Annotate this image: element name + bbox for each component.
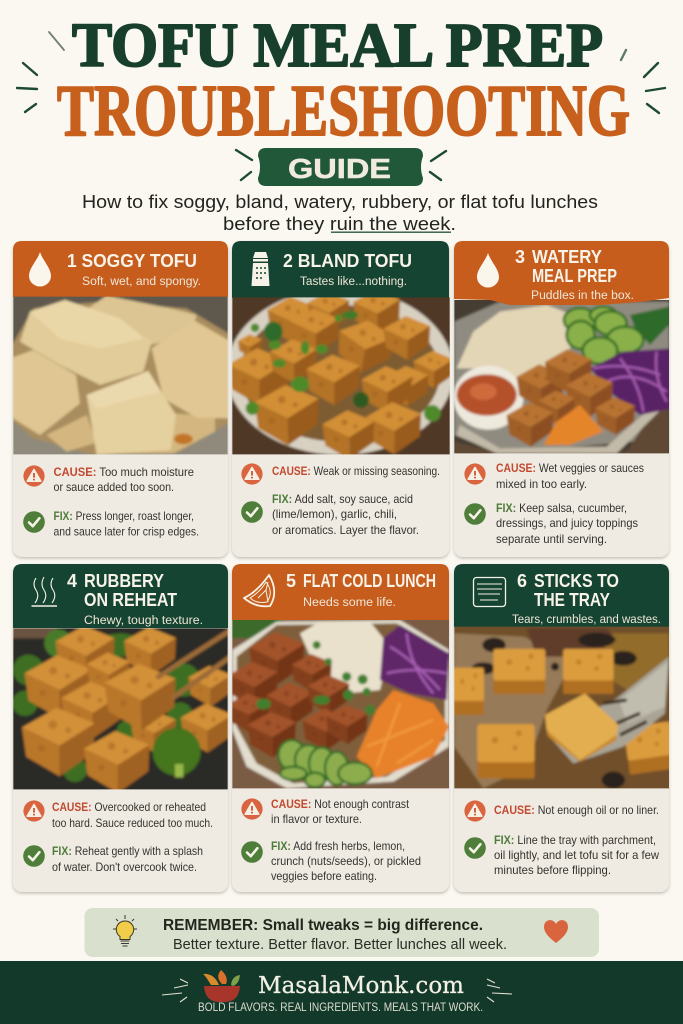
fix: [241, 839, 421, 883]
icon: salt shaker: [252, 252, 270, 286]
cause: [464, 800, 659, 822]
fix: [241, 492, 419, 537]
cause: or sauce added too soon.: [54, 480, 174, 494]
footer rays: [162, 979, 512, 1002]
icon: baking tray: [474, 578, 506, 606]
header: [232, 564, 449, 620]
fix: and sauce later for crisp edges.: [54, 524, 199, 538]
fix: minutes before flipping.: [494, 863, 611, 877]
fix: FIX: Add fresh herbs, lemon,: [271, 839, 405, 853]
photo: tofu in pan with chopsticks: [10, 625, 233, 793]
heading: 3: [515, 247, 525, 267]
fix: [23, 844, 203, 874]
fix: or aromatics. Layer the flavor.: [272, 523, 419, 537]
heading: 6: [517, 571, 527, 591]
fix: [464, 501, 638, 546]
header: [454, 241, 669, 305]
header: [13, 564, 228, 628]
header: [232, 241, 449, 298]
panel: 1 soggy tofu: [10, 241, 231, 557]
tagline: Chewy, tough texture.: [84, 613, 203, 627]
callout: remember: [84, 908, 599, 957]
heading: FLAT COLD LUNCH: [303, 571, 436, 591]
heading: RUBBERY: [84, 571, 164, 591]
title: [57, 12, 630, 151]
heading: MEAL PREP: [532, 266, 617, 286]
heading: 2 BLAND TOFU: [283, 251, 412, 271]
photo: lunch box with glazed tofu: [228, 617, 452, 792]
guide badge: [258, 148, 423, 186]
logo: bowl with leaves: [203, 970, 240, 1002]
photo: soggy tofu: [10, 293, 231, 458]
heading: [515, 247, 617, 286]
brand name: MasalaMonk.com: [258, 973, 464, 999]
heading: [67, 571, 177, 610]
heading: ON REHEAT: [84, 590, 177, 610]
cause: too hard. Sauce reduced too much.: [52, 816, 213, 830]
fix: FIX: Add salt, soy sauce, acid: [272, 492, 413, 506]
cause: [464, 461, 644, 491]
fix: separate until serving.: [496, 532, 607, 546]
heading: [517, 571, 619, 610]
cause: CAUSE: Not enough oil or no liner.: [494, 803, 659, 817]
fix: oil lightly, and let tofu sit for a few: [494, 848, 659, 862]
icon: heart: [544, 920, 568, 943]
cause: in flavor or texture.: [271, 812, 362, 826]
tagline: Soft, wet, and spongy.: [82, 274, 201, 288]
icon: citrus slice: [244, 575, 274, 606]
panel: 3 watery meal prep: [451, 241, 672, 557]
tagline: BOLD FLAVORS. REAL INGREDIENTS. MEALS THAT WORK.: [198, 1002, 483, 1014]
title line 1: TOFU MEAL PREP: [72, 12, 603, 80]
header: [454, 564, 669, 627]
remember text: [163, 917, 507, 953]
heading: 1 SOGGY TOFU: [67, 251, 197, 271]
cause: [241, 463, 440, 485]
icon: water drop: [29, 252, 51, 286]
heading: WATERY: [532, 247, 602, 267]
tagline: Tears, crumbles, and wastes.: [512, 612, 661, 626]
tagline: Needs some life.: [303, 595, 396, 609]
heading: STICKS TO: [534, 571, 619, 591]
heading: THE TRAY: [534, 590, 610, 610]
fix: [464, 833, 659, 877]
heading: 4: [67, 571, 77, 591]
cause: CAUSE: Weak or missing seasoning.: [272, 464, 440, 478]
fix: FIX: Line the tray with parchment,: [494, 833, 656, 847]
icon: light bulb: [113, 915, 137, 946]
panel: 6 sticks to the tray: [451, 564, 676, 892]
heading: 5: [286, 571, 296, 591]
cause: CAUSE: Overcooked or reheated: [52, 800, 206, 814]
remember text: Better texture. Better flavor. Better lunches all week.: [173, 937, 507, 953]
fix: of water. Don't overcook twice.: [52, 860, 197, 874]
panel: 2 bland tofu: [227, 241, 453, 557]
cause: [23, 465, 194, 494]
cause: [23, 800, 213, 830]
cause: [241, 797, 410, 826]
tagline: Tastes like...nothing.: [300, 274, 407, 288]
header: [13, 241, 228, 297]
icon: water drop: [477, 253, 499, 288]
fix: FIX: Keep salsa, cucumber,: [496, 501, 627, 515]
cause: CAUSE: Too much moisture: [54, 465, 194, 479]
cause: CAUSE: Not enough contrast: [271, 797, 410, 811]
photo: tofu on baking tray with spatula: [451, 623, 676, 792]
remember text: REMEMBER: Small tweaks = big difference.: [163, 917, 483, 934]
cause: CAUSE: Wet veggies or sauces: [496, 461, 644, 475]
subtitle: How to fix soggy, bland, watery, rubbery, or flat tofu lunches: [82, 191, 598, 212]
footer: [0, 961, 683, 1024]
title accent rays: [17, 32, 665, 180]
fix: veggies before eating.: [271, 869, 377, 883]
fix: dressings, and juicy toppings: [496, 516, 638, 530]
photo: meal prep box: [451, 297, 672, 457]
panel: 4 rubbery on reheat: [10, 564, 233, 892]
fix: FIX: Reheat gently with a splash: [52, 844, 203, 858]
tagline: Puddles in the box.: [531, 288, 634, 302]
guide badge: GUIDE: [288, 153, 391, 184]
fix: (lime/lemon), garlic, chili,: [272, 507, 397, 521]
fix: [23, 509, 199, 538]
panel: 5 flat cold lunch: [228, 564, 452, 892]
subtitle: before they ruin the week.: [223, 213, 456, 234]
icon: steam: [32, 577, 57, 606]
fix: crunch (nuts/seeds), or pickled: [271, 854, 421, 868]
fix: FIX: Press longer, roast longer,: [54, 509, 194, 523]
cause: mixed in too early.: [496, 477, 587, 491]
photo: seasoned tofu bowl: [232, 297, 450, 454]
subtitle: [82, 191, 598, 234]
